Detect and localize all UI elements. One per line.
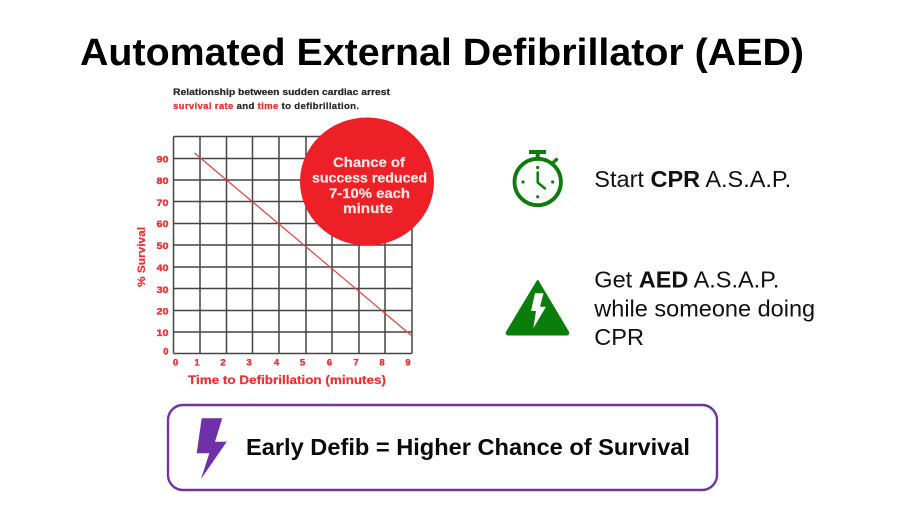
x axis labels: 4 xyxy=(274,358,280,368)
x axis title: Time to Defibrillation (minutes) xyxy=(188,375,386,387)
text: start CPR: Start CPR A.S.A.P. xyxy=(594,166,791,192)
icon: warning triangle with lightning bolt xyxy=(507,281,568,334)
y axis labels: 0 xyxy=(163,346,168,358)
icon: stopwatch xyxy=(514,150,561,205)
chart heading: Relationship between sudden cardiac arrest xyxy=(173,87,391,98)
y axis labels: 90 xyxy=(156,154,168,166)
y axis labels: 10 xyxy=(156,328,168,339)
x axis labels: 2 xyxy=(220,358,226,368)
icon: purple lightning bolt xyxy=(197,418,227,479)
x axis labels: 5 xyxy=(300,358,306,368)
title: Automated External Defibrillator (AED) xyxy=(80,32,804,74)
callout box: early defib xyxy=(168,405,717,490)
x axis labels: 0 xyxy=(173,358,178,368)
x axis labels: 1 xyxy=(194,358,200,368)
chart heading xyxy=(173,87,391,112)
y axis labels: 70 xyxy=(156,198,168,209)
text: get AED xyxy=(593,266,815,350)
callout: chance of success: minute xyxy=(343,200,393,216)
y axis title: % Survival xyxy=(136,227,148,287)
y axis labels: 20 xyxy=(156,306,168,318)
chart grid xyxy=(174,136,412,354)
x axis labels: 7 xyxy=(353,358,359,368)
callout: chance of success: 7-10% each xyxy=(329,185,410,201)
x axis labels xyxy=(173,358,411,368)
text: get AED: CPR xyxy=(594,324,644,350)
survival trend line xyxy=(194,153,412,336)
y axis labels: 40 xyxy=(156,263,168,274)
callout: chance of success: success reduced xyxy=(312,170,427,186)
y axis labels: 30 xyxy=(156,285,168,296)
x axis labels: 9 xyxy=(405,358,411,368)
y axis labels: 50 xyxy=(156,241,168,252)
text: get AED: Get AED A.S.A.P. xyxy=(594,266,779,292)
chart heading: survival rate and time to defibrillation. xyxy=(173,101,359,112)
callout: chance of success: Chance of xyxy=(333,154,405,170)
x axis labels: 6 xyxy=(327,358,332,368)
text: get AED: while someone doing xyxy=(593,296,815,322)
y axis labels xyxy=(156,154,168,358)
x axis labels: 8 xyxy=(379,358,385,368)
y axis labels: 60 xyxy=(156,219,168,230)
callout text: Early Defib = Higher Chance of Survival xyxy=(246,434,690,460)
line chart: survival vs time to defibrillation xyxy=(136,136,412,387)
callout: chance of success xyxy=(300,118,434,246)
x axis labels: 3 xyxy=(246,358,252,368)
y axis labels: 80 xyxy=(156,176,168,187)
